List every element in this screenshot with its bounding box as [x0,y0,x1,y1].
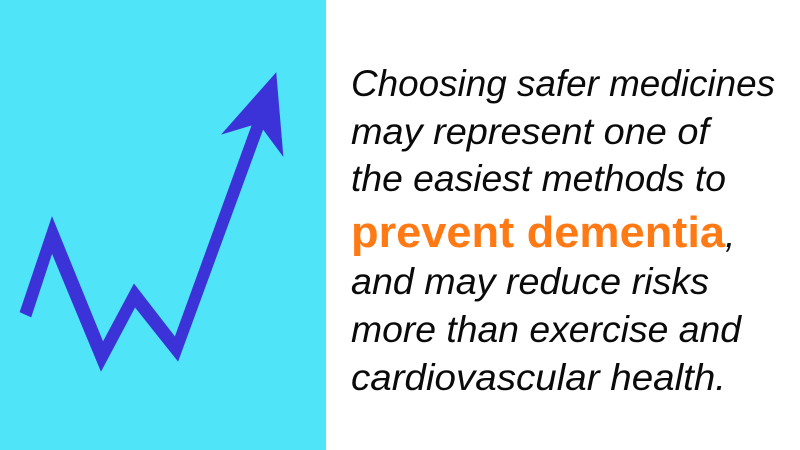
text block: dementia statement: may represent one of [351,111,713,152]
icon: rising zigzag arrow [20,73,283,371]
highlight: prevent dementia: prevent dementia [351,208,726,257]
text block: dementia statement [351,63,775,398]
text block: dementia statement: cardiovascular health. [351,357,726,398]
text block: dementia statement: and may reduce risks [351,261,709,302]
text block: dementia statement: more than exercise and [351,309,742,350]
text block: dementia statement: Choosing safer medicines [351,63,775,104]
text block: dementia statement: the easiest methods to [351,158,726,199]
panel: cyan background [0,0,326,450]
text block: dementia statement: , [725,214,735,255]
